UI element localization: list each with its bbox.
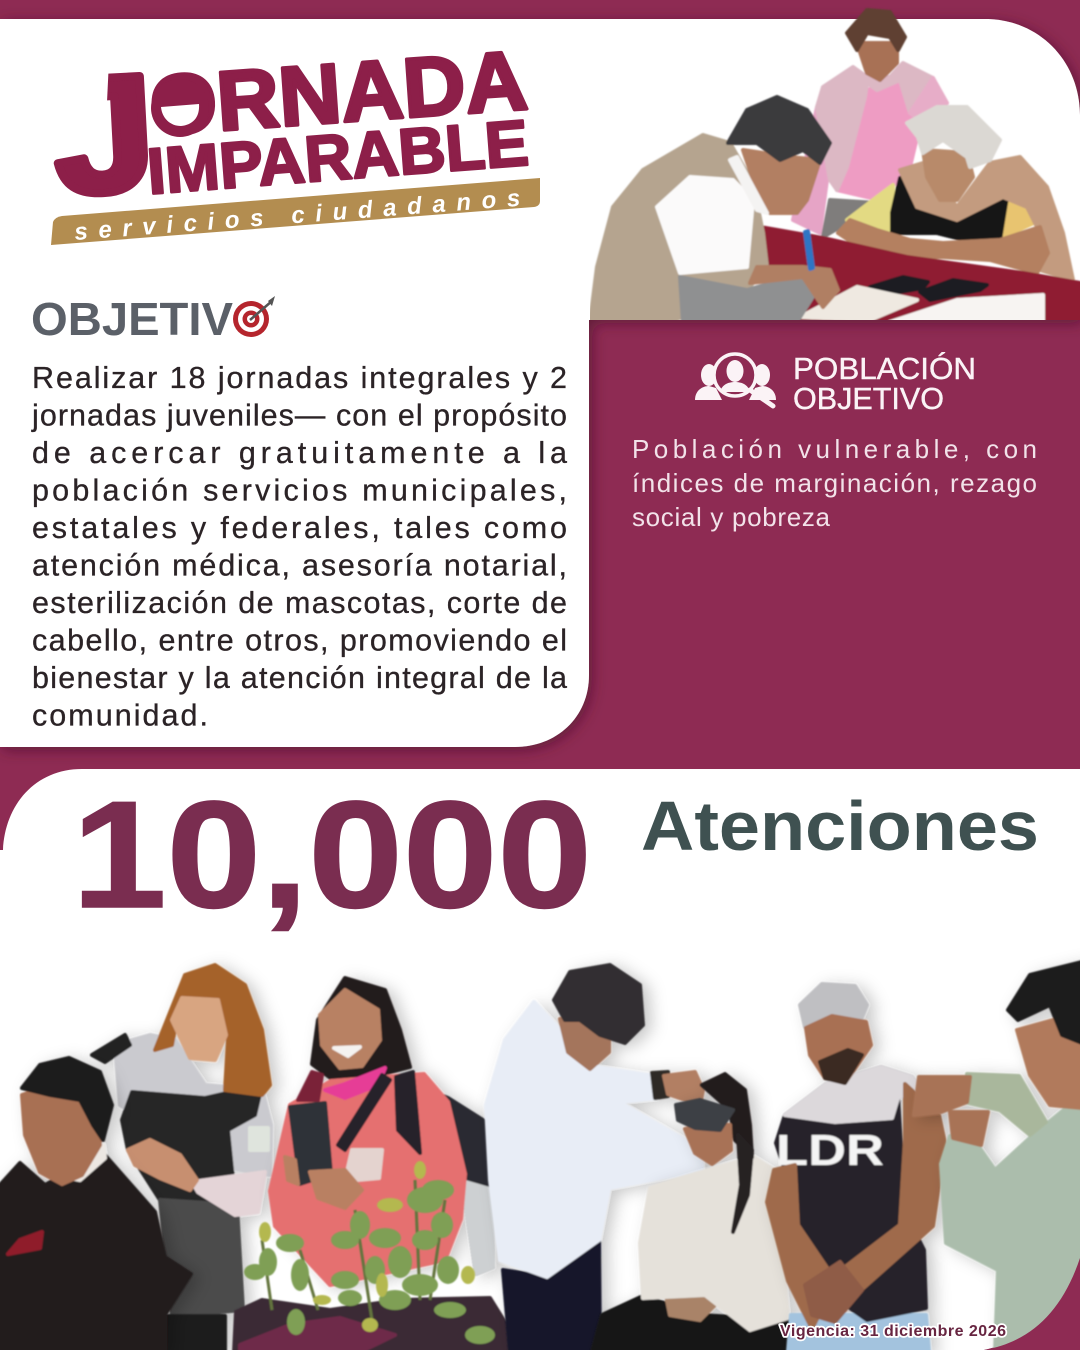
figure: seated woman with lens frame <box>592 1074 788 1350</box>
text: objective paragraph: esterilización de mascotas, corte de <box>32 586 567 620</box>
text: población description <box>632 434 1037 532</box>
papers <box>800 287 917 320</box>
figure: seated official <box>590 97 838 322</box>
text: objective paragraph: bienestar y la atención integral de la <box>32 661 567 695</box>
panel: bottom white card <box>0 769 1080 1350</box>
figure: nurse vaccinating <box>914 962 1080 1350</box>
text: población description: social y pobreza <box>632 502 831 532</box>
figure: optometrist <box>486 965 703 1350</box>
photo: attention desk <box>590 10 1080 322</box>
text: objective paragraph: de acercar gratuitamente a la <box>32 436 567 470</box>
panel: top white card <box>0 19 1080 747</box>
figure: standing woman <box>793 10 947 237</box>
text: población description: índices de marginación, rezago <box>632 468 1037 498</box>
phones <box>870 277 928 295</box>
text: objective paragraph: estatales y federales, tales como <box>32 511 567 545</box>
stat label: Atenciones: Atenciones <box>641 787 1039 865</box>
logo word ORNADA: ORNADA <box>147 33 530 153</box>
heading: Población objetivo: POBLACIÓN <box>793 351 976 386</box>
text: objective paragraph: comunidad. <box>32 698 208 732</box>
icon: target with arrow <box>233 296 275 337</box>
heading: OBJETIVO: OBJETIV <box>31 293 233 345</box>
plants <box>234 1161 513 1350</box>
logo: Jornada Imparable <box>49 33 531 229</box>
figure: man in LDR shirt <box>767 984 945 1350</box>
text: objective paragraph: población servicios municipales, <box>32 474 567 508</box>
text: objective paragraph: jornadas juveniles— con el propósito <box>31 398 567 432</box>
text: Vigencia: Vigencia: 31 diciembre 2026 <box>780 1323 1006 1340</box>
stat: 10,000: 10,000 <box>72 770 592 940</box>
figure: hairdresser <box>92 965 271 1350</box>
table cloth <box>760 227 1080 322</box>
photo strip: services <box>0 962 1080 1350</box>
text: objective paragraph <box>31 361 567 732</box>
logo word IMPARABLE: IMPARABLE <box>144 106 531 208</box>
text: objective paragraph: atención médica, asesoría notarial, <box>32 548 567 582</box>
figure: elderly woman <box>838 107 1073 280</box>
heading: Población objetivo: OBJETIVO <box>793 382 944 416</box>
text: objective paragraph: Realizar 18 jornadas integrales y 2 <box>32 361 567 395</box>
logo band: servicios ciudadanos: servicios ciudadanos <box>73 185 521 246</box>
icon: people with magnifier <box>695 354 776 406</box>
text: objective paragraph: cabello, entre otros, promoviendo el <box>32 624 567 658</box>
shirt print: LDR <box>776 1126 884 1175</box>
corner: bottom right maroon curve <box>984 1258 1080 1350</box>
logo letter J: J <box>49 40 160 229</box>
heading: Población objetivo <box>793 351 976 416</box>
figure: seated man in cape <box>0 1058 191 1350</box>
figure: young woman with backpack <box>270 978 493 1285</box>
text: población description: Población vulnerable, con <box>632 434 1037 464</box>
